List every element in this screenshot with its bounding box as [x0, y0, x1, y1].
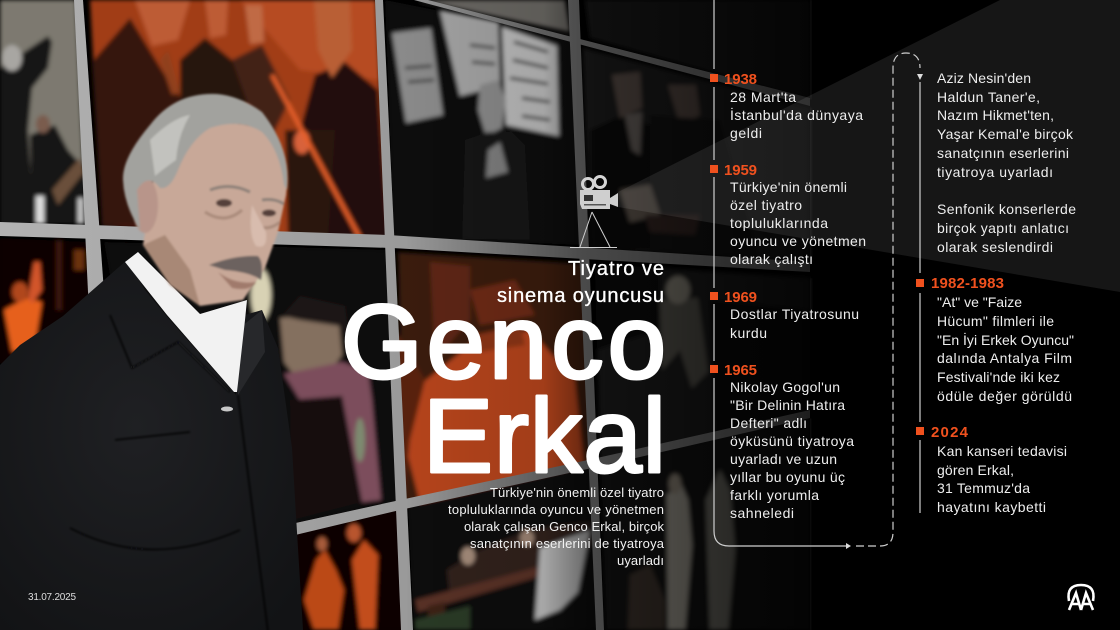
entry: 1938: geldi — [730, 125, 762, 141]
mustache — [209, 256, 262, 280]
entry: 1982-1983: "At" ve "Faize — [937, 294, 1022, 310]
title: Genco Erkal: Erkal — [423, 378, 666, 495]
entry: 1959: Türkiye'nin önemli — [730, 179, 847, 195]
entry: 1969 — [710, 289, 859, 341]
entry: symphonic concerts: olarak seslendirdi — [937, 239, 1053, 255]
timeline connector — [714, 0, 923, 549]
intro text: Türkiye'nin önemli özel tiyatro — [490, 485, 664, 500]
photo: conductor on stone wall — [0, 0, 86, 224]
entry: 1969: 1969 — [724, 289, 757, 306]
face shadow — [143, 235, 200, 306]
jacket button — [221, 406, 233, 412]
eyebrows — [210, 186, 250, 192]
entry: 1938 — [710, 71, 863, 141]
date: 31.07.2025 — [28, 592, 76, 603]
photo: table scene — [408, 465, 602, 630]
entry: 2024: 2024 — [931, 424, 969, 441]
hair — [123, 94, 288, 230]
photo darkening overlay — [380, 0, 810, 630]
entry: 1965: 1965 — [724, 362, 757, 379]
photo: protest signs — [385, 0, 583, 245]
entry: 2024: gören Erkal, — [937, 462, 1014, 478]
entry: 1982-1983 — [916, 275, 1074, 404]
photo: man with scarf — [104, 242, 400, 524]
photo: orange figure on stage — [0, 238, 94, 366]
icon: film projector — [570, 176, 618, 248]
entry: 1969: kurdu — [730, 325, 767, 341]
entry: 1965: sahneledi — [730, 505, 794, 521]
entry: 1965: Defteri" adlı — [730, 415, 807, 431]
entry: 1959: olarak çalıştı — [730, 251, 813, 267]
entry: 2024: Kan kanseri tedavisi — [937, 443, 1067, 459]
projector light beam — [618, 0, 1120, 292]
entry: 1982-1983: Hücum" filmleri ile — [937, 313, 1054, 329]
eye bags — [205, 210, 280, 228]
entry: symphonic concerts — [937, 201, 1076, 255]
entry: 1965: yıllar bu oyunu üç — [730, 469, 845, 485]
intro text: topluluklarında oyuncu ve yönetmen — [448, 502, 664, 517]
entry: adaptations: Aziz Nesin'den — [937, 70, 1031, 86]
entry: 2024: 31 Temmuz'da — [937, 480, 1030, 496]
entry: 1938: İstanbul'da dünyaya — [730, 106, 863, 123]
ear — [132, 177, 158, 233]
entry: 1959: özel tiyatro — [730, 197, 802, 213]
entry: 1982-1983: 1982-1983 — [931, 275, 1004, 292]
photo: faint top strip — [418, 0, 570, 32]
entry: 1982-1983: dalında Antalya Film — [937, 350, 1072, 366]
intro text — [448, 485, 665, 568]
entry: 2024 — [916, 424, 1067, 515]
shirt collar — [125, 252, 247, 392]
jacket lapel — [237, 310, 265, 395]
entry: adaptations — [937, 70, 1074, 180]
entry: 1965 — [710, 362, 854, 521]
entry: 1965: "Bir Delinin Hatıra — [730, 397, 845, 413]
entry: 1959: 1959 — [724, 162, 757, 179]
photo grid frame — [0, 0, 810, 630]
entry: 1982-1983: "En İyi Erkek Oyuncu" — [937, 331, 1074, 348]
subtitle: sinema oyuncusu — [497, 285, 664, 307]
entry: 1965: farklı yorumla — [730, 487, 819, 503]
timeline column two — [916, 70, 1076, 515]
photo: laughing couple — [583, 48, 810, 262]
entry: 1982-1983: Festivali'nde iki kez — [937, 369, 1060, 385]
entry: 1965: uyarladı ve uzun — [730, 451, 837, 467]
entry: symphonic concerts: birçok yapıtı anlatıcı — [937, 220, 1069, 236]
entry: adaptations: Haldun Taner'e, — [937, 89, 1040, 105]
entry: adaptations: tiyatroya uyarladı — [937, 164, 1053, 180]
photo: orange group portrait — [90, 0, 388, 240]
neck and face — [143, 123, 286, 306]
entry: 1938: 28 Mart'ta — [730, 89, 796, 105]
photo: seated figure on steps — [595, 264, 810, 462]
entry: 2024: hayatını kaybetti — [937, 499, 1046, 515]
eyes — [216, 199, 232, 207]
entry: 1938: 1938 — [724, 71, 757, 88]
photo: dark top right — [585, 0, 810, 100]
nose — [251, 205, 266, 247]
entry: symphonic concerts: Senfonik konserlerde — [937, 201, 1076, 217]
jacket — [0, 260, 303, 630]
portrait: Genco Erkal — [0, 94, 303, 630]
photo: man in orange shirt — [395, 252, 592, 507]
mouth — [218, 272, 256, 289]
icon: AA agency logo — [1068, 585, 1094, 610]
intro text: sanatçının eserlerini de tiyatroya — [470, 536, 665, 551]
intro text: uyarladı — [617, 553, 664, 568]
entry: 1959 — [710, 162, 866, 267]
photo wall — [0, 0, 810, 630]
photo: stage door actors — [600, 418, 810, 630]
subtitle — [497, 258, 664, 307]
entry: 1969: Dostlar Tiyatrosunu — [730, 306, 859, 322]
entry: 1959: topluluklarında — [730, 215, 828, 231]
intro text: olarak çalışan Genco Erkal, birçok — [464, 519, 664, 534]
entry: adaptations: Yaşar Kemal'e birçok — [937, 126, 1074, 142]
title: Genco Erkal: Genco — [341, 284, 666, 401]
subtitle: Tiyatro ve — [568, 258, 664, 280]
entry: adaptations: Nazım Hikmet'ten, — [937, 107, 1054, 123]
timeline column one — [710, 71, 866, 521]
entry: 1959: oyuncu ve yönetmen — [730, 233, 866, 249]
photo: orange pair on stage — [290, 506, 408, 630]
entry: 1982-1983: ödüle değer görüldü — [937, 388, 1072, 404]
entry: 1965: öyküsünü tiyatroya — [730, 433, 854, 449]
entry: adaptations: sanatçının eserlerini — [937, 145, 1069, 161]
title: Genco Erkal — [341, 284, 666, 495]
entry: 1965: Nikolay Gogol'un — [730, 379, 840, 395]
